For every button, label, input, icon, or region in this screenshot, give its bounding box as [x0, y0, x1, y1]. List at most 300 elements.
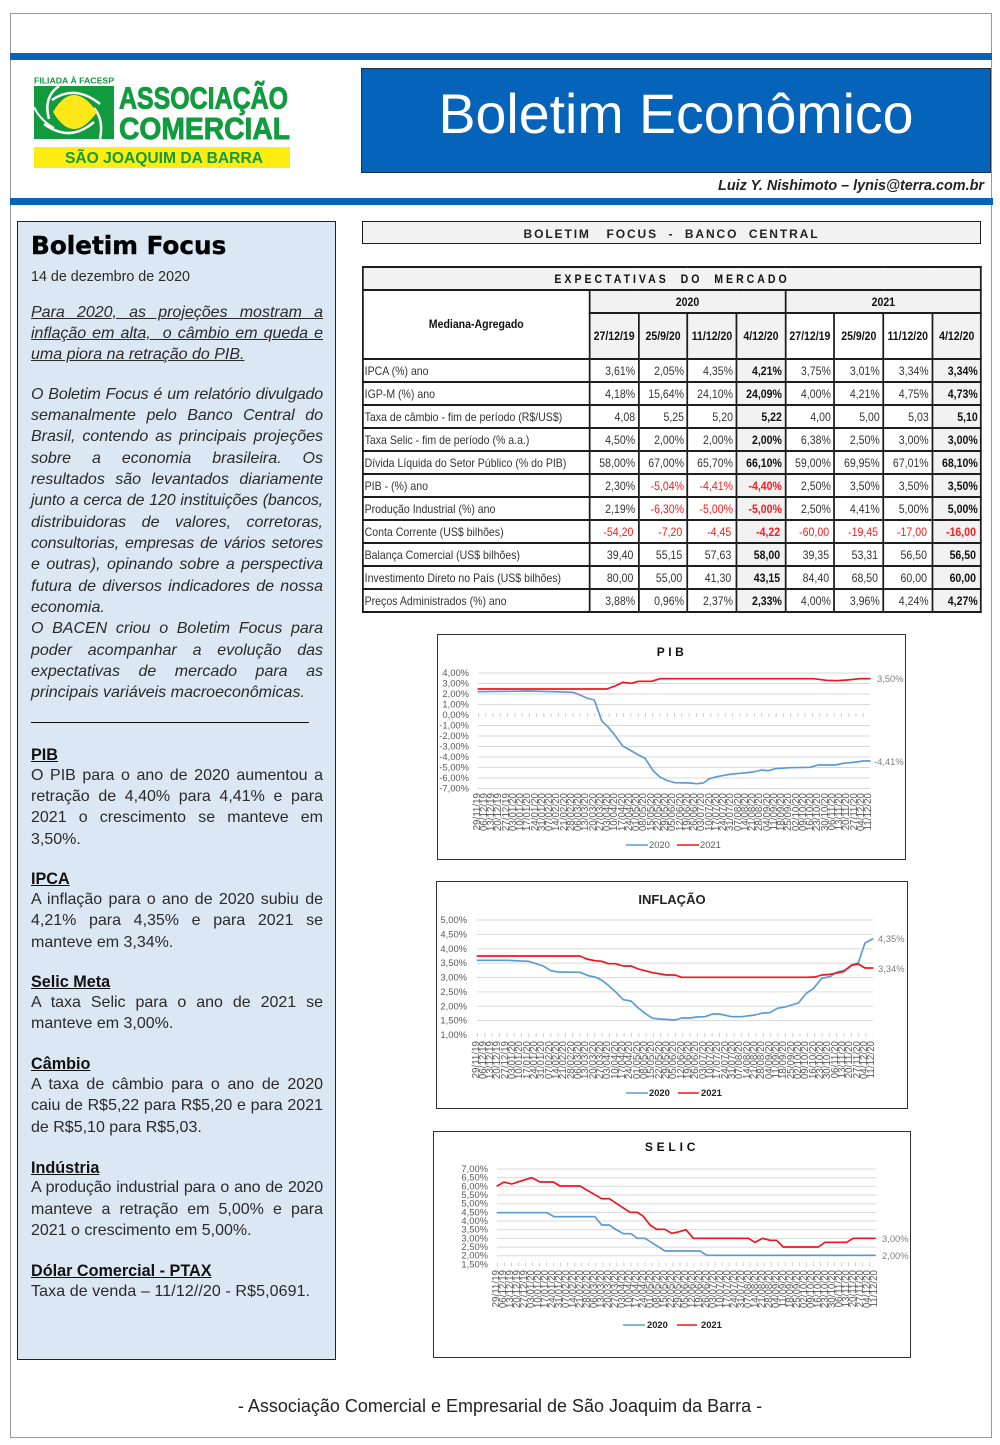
- x axis dates: 17/01/20: [522, 792, 533, 831]
- x axis dates: 03/01/20: [508, 792, 519, 831]
- x axis dates: 29/05/20: [673, 1270, 684, 1308]
- explanation of Boletim Focus: semanalmente pelo Banco Central do: [31, 407, 323, 424]
- table: expectativas do mercado: 55,00: [655, 571, 682, 585]
- table: expectativas do mercado: 56,50: [949, 548, 975, 562]
- x axis dates: 24/04/20: [624, 1040, 635, 1079]
- table: expectativas do mercado: [362, 266, 982, 613]
- x axis dates: 13/11/20: [841, 1270, 852, 1307]
- table: expectativas do mercado: -4,40%: [748, 479, 781, 493]
- y axis labels: 5,00%: [440, 914, 466, 924]
- x axis dates: 09/10/20: [798, 792, 809, 831]
- table: expectativas do mercado: 58,00: [753, 548, 780, 562]
- y axis labels: -3,00%: [439, 740, 468, 751]
- y axis labels: 6,00%: [461, 1180, 488, 1191]
- legend: 2020: [646, 1318, 667, 1330]
- x axis dates: 03/07/20: [696, 792, 707, 831]
- lines 2020 and 2021: [477, 678, 870, 783]
- x axis dates: 03/07/20: [698, 1040, 709, 1079]
- x axis dates: 18/09/20: [776, 792, 787, 831]
- table: expectativas do mercado: 3,34%: [947, 364, 977, 378]
- x axis dates: 06/12/19: [498, 1270, 509, 1308]
- x axis dates: 29/05/20: [660, 792, 671, 831]
- table: expectativas do mercado: 60,00: [949, 571, 975, 585]
- chart title: SELIC: [644, 1140, 699, 1154]
- table: expectativas do mercado: 3,50%: [898, 479, 928, 493]
- table: expectativas do mercado: 2,33%: [751, 594, 781, 608]
- x axis dates: 23/10/20: [815, 1040, 826, 1079]
- legend: 2021: [700, 1086, 721, 1098]
- explanation of Boletim Focus: e outras), opinando sobre a perspectiva: [31, 556, 323, 573]
- table: expectativas do mercado: 3,50%: [849, 479, 879, 493]
- table: expectativas do mercado: 68,50: [851, 571, 878, 585]
- lower blue rule: [10, 198, 993, 205]
- x axis dates: 13/12/19: [485, 1040, 496, 1079]
- table: expectativas do mercado: 25/9/20: [645, 329, 680, 343]
- section: Selic Meta: Selic Meta: [31, 973, 110, 991]
- x axis dates: 06/12/19: [478, 1040, 489, 1079]
- explanation of Boletim Focus: O BACEN criou o Boletim Focus para: [31, 620, 323, 637]
- section: Indústria: manteve a retração em 5,00% e para: [31, 1201, 323, 1218]
- logo: Associação Comercial: [34, 76, 290, 168]
- x axis dates: 13/03/20: [596, 1270, 607, 1308]
- table: expectativas do mercado: 5,25: [663, 410, 684, 424]
- x axis dates: 20/03/20: [603, 1270, 614, 1308]
- table: expectativas do mercado: 4,21%: [849, 387, 879, 401]
- table: expectativas do mercado: -5,00%: [748, 502, 781, 516]
- table: expectativas do mercado: 3,96%: [849, 594, 879, 608]
- x axis dates: 31/01/20: [554, 1270, 565, 1308]
- explanation of Boletim Focus: junto a cerca de 120 instituições (bancos,: [31, 492, 323, 509]
- chart: PIB: [437, 634, 906, 860]
- x axis dates: 17/07/20: [712, 1040, 723, 1079]
- x axis dates: 17/04/20: [631, 1270, 642, 1308]
- section: PIB: PIB: [31, 746, 58, 764]
- explanation of Boletim Focus: resultados são levantados diariamente: [31, 471, 323, 488]
- x axis dates: 21/02/20: [575, 1270, 586, 1308]
- x axis dates: 13/12/19: [505, 1270, 516, 1308]
- y axis labels: 1,50%: [461, 1258, 488, 1269]
- x axis dates: 01/05/20: [645, 1270, 656, 1308]
- table: expectativas do mercado: 24,09%: [746, 387, 781, 401]
- x axis dates: 27/12/19: [500, 1040, 511, 1079]
- x axis dates: 11/12/20: [863, 792, 874, 830]
- x axis dates: 28/02/20: [582, 1270, 593, 1308]
- x axis dates: 29/11/19: [470, 1040, 482, 1078]
- legend: 2020: [648, 1086, 669, 1098]
- x axis dates: 09/10/20: [806, 1270, 817, 1308]
- x axis dates: 01/05/20: [631, 792, 642, 831]
- x axis dates: 16/10/20: [808, 1040, 819, 1079]
- y axis labels: 2,50%: [440, 985, 466, 996]
- x axis dates: [472, 792, 874, 831]
- x axis dates: 26/06/20: [701, 1270, 712, 1308]
- x axis dates: 20/11/20: [848, 1270, 859, 1307]
- table: expectativas do mercado: 65,70%: [697, 456, 732, 470]
- x axis dates: 31/07/20: [736, 1270, 747, 1308]
- table: expectativas do mercado: 4,27%: [947, 594, 977, 608]
- x axis dates: 03/07/20: [708, 1270, 719, 1308]
- x axis dates: 22/05/20: [654, 1040, 665, 1079]
- table: expectativas do mercado: -4,41%: [699, 479, 732, 493]
- y axis labels: 3,00%: [442, 677, 468, 688]
- x axis dates: 22/05/20: [666, 1270, 677, 1308]
- x axis dates: 07/08/20: [732, 792, 744, 831]
- x axis dates: 15/05/20: [646, 1040, 657, 1079]
- table: expectativas do mercado: Mediana-Agregado: [428, 317, 523, 331]
- x axis dates: 21/02/20: [558, 1040, 569, 1079]
- end value labels: 2,00%: [882, 1250, 908, 1260]
- table: expectativas do mercado: 3,50%: [947, 479, 977, 493]
- explanation of Boletim Focus: economia.: [31, 599, 105, 616]
- table: expectativas do mercado: 6,38%: [800, 433, 830, 447]
- table: expectativas do mercado: 5,20: [712, 410, 732, 424]
- x axis dates: 17/04/20: [616, 792, 628, 831]
- section: IPCA: [31, 870, 323, 951]
- x axis dates: 06/03/20: [589, 1270, 600, 1308]
- x axis dates: 20/11/20: [844, 1040, 855, 1078]
- table: expectativas do mercado: 4,00: [810, 410, 830, 424]
- x axis dates: 10/07/20: [715, 1270, 726, 1308]
- x axis dates: 21/08/20: [747, 792, 758, 831]
- section: Câmbio: caiu de R$5,22 para R$5,20 e para 2021: [31, 1097, 323, 1114]
- section: IPCA: IPCA: [31, 870, 70, 888]
- end value labels: [874, 672, 903, 766]
- y axis labels: -7,00%: [439, 782, 468, 793]
- table: expectativas do mercado: 57,63: [704, 548, 731, 562]
- y axis labels: [440, 914, 466, 1040]
- x axis dates: 12/06/20: [674, 792, 686, 831]
- explanation of Boletim Focus: sobre a economia brasileira. Os: [31, 450, 323, 467]
- table: expectativas do mercado: 4,24%: [898, 594, 928, 608]
- table: expectativas do mercado: 2,00%: [654, 433, 684, 447]
- table: expectativas do mercado: 2,19%: [605, 502, 635, 516]
- table: expectativas do mercado: 2020: [675, 294, 699, 308]
- y axis labels: -4,00%: [439, 750, 468, 762]
- section: PIB: 3,50%.: [31, 831, 81, 848]
- table: expectativas do mercado: 2021: [871, 294, 895, 308]
- x axis dates: 27/03/20: [595, 792, 606, 831]
- table: expectativas do mercado: -4,45: [707, 525, 731, 539]
- table: expectativas do mercado: 4/12/20: [743, 329, 778, 343]
- table: expectativas do mercado: 3,34%: [898, 364, 928, 378]
- legend: [622, 1318, 721, 1330]
- x axis dates: 11/09/20: [771, 1040, 782, 1078]
- x axis dates: 23/10/20: [820, 1270, 831, 1308]
- section: Câmbio: de R$5,10 para R$5,03.: [31, 1119, 202, 1136]
- x axis dates: 31/01/20: [537, 792, 548, 831]
- x axis dates: 04/09/20: [762, 792, 772, 831]
- section: Selic Meta: manteve em 3,00%.: [31, 1015, 173, 1032]
- end value labels: -4,41%: [874, 756, 903, 766]
- y axis labels: 3,50%: [461, 1223, 488, 1234]
- intro summary: uma piora na retração do PIB.: [31, 346, 244, 363]
- table: expectativas do mercado: IPCA (%) ano: [364, 364, 428, 378]
- x axis dates: 10/01/20: [514, 1040, 525, 1079]
- x axis dates: 15/05/20: [646, 792, 656, 831]
- table: expectativas do mercado: 39,35: [802, 548, 829, 562]
- x axis dates: 07/02/20: [561, 1270, 572, 1308]
- table: expectativas do mercado: 69,95%: [843, 456, 879, 470]
- x axis dates: 27/11/20: [848, 792, 860, 830]
- table: expectativas do mercado: 4/12/20: [939, 329, 974, 343]
- explanation of Boletim Focus: O Boletim Focus é um relatório divulgado: [31, 386, 323, 403]
- table: expectativas do mercado: 4,50%: [605, 433, 635, 447]
- table: expectativas do mercado: 3,01%: [849, 364, 879, 378]
- x axis dates: 30/10/20: [827, 1270, 838, 1308]
- x axis dates: 17/01/20: [540, 1270, 551, 1308]
- table: expectativas do mercado: Taxa Selic - fim de período (% a.a.): [364, 433, 529, 447]
- x axis dates: 22/05/20: [653, 792, 664, 831]
- section: Câmbio: A taxa de câmbio para o ano de 2020: [31, 1076, 323, 1093]
- table: expectativas do mercado: 27/12/19: [593, 329, 634, 343]
- chart title: PIB: [656, 644, 687, 658]
- table: expectativas do mercado: 0,96%: [654, 594, 684, 608]
- x axis dates: 03/01/20: [507, 1040, 518, 1079]
- y axis labels: 3,00%: [440, 971, 466, 982]
- table: expectativas do mercado: 59,00%: [795, 456, 830, 470]
- x axis dates: 06/12/19: [479, 792, 490, 831]
- x axis dates: 26/06/20: [689, 792, 700, 831]
- x axis dates: 06/11/20: [834, 1270, 845, 1307]
- section: PIB: O PIB para o ano de 2020 aumentou a: [31, 767, 323, 784]
- y axis labels: -2,00%: [439, 730, 468, 740]
- table: expectativas do mercado: PIB - (%) ano: [364, 479, 427, 493]
- x axis dates: 16/10/20: [805, 792, 816, 831]
- table: expectativas do mercado: 5,00%: [947, 502, 977, 516]
- table: expectativas do mercado: Produção Industrial (%) ano: [364, 502, 495, 516]
- section: Indústria: A produção industrial para o ano de 2020: [31, 1179, 323, 1196]
- y axis labels: 0,00%: [442, 708, 468, 720]
- table: expectativas do mercado: 3,88%: [605, 594, 635, 608]
- x axis dates: 04/12/20: [859, 1040, 870, 1079]
- end value labels: 3,00%: [882, 1232, 908, 1244]
- section: IPCA: manteve em 3,34%.: [31, 934, 173, 951]
- table: expectativas do mercado: 4,00%: [800, 387, 830, 401]
- x axis dates: 21/08/20: [749, 1040, 760, 1079]
- x axis dates: 24/01/20: [547, 1270, 558, 1308]
- table: expectativas do mercado: 5,00: [859, 410, 879, 424]
- table: expectativas do mercado: 68,10%: [941, 456, 977, 470]
- x axis dates: 16/10/20: [813, 1270, 824, 1308]
- y axis labels: 2,00%: [442, 688, 468, 698]
- table: expectativas do mercado: 4,41%: [849, 502, 879, 516]
- section: Dólar Comercial: [31, 1262, 310, 1300]
- section: PIB: retração de 4,40% para 4,41% e para: [31, 788, 323, 805]
- table: expectativas do mercado: Dívida Líquida do Setor Público (% do PIB): [364, 456, 566, 470]
- y axis labels: [439, 666, 468, 793]
- section: Indústria: [31, 1159, 324, 1239]
- end value labels: 4,35%: [878, 932, 904, 944]
- x axis dates: 02/10/20: [790, 792, 802, 831]
- x axis dates: 19/06/20: [683, 1040, 694, 1079]
- table: expectativas do mercado: IGP-M (%) ano: [364, 387, 434, 401]
- table: expectativas do mercado: 2,50%: [800, 502, 830, 516]
- x axis dates: 05/06/20: [680, 1270, 691, 1308]
- x axis dates: 14/08/20: [750, 1270, 761, 1308]
- table: expectativas do mercado: -60,00: [799, 525, 829, 539]
- table: expectativas do mercado: 4,75%: [898, 387, 928, 401]
- x axis dates: 27/11/20: [855, 1270, 866, 1307]
- x axis dates: 02/10/20: [793, 1040, 804, 1079]
- explanation of Boletim Focus: expectativas de mercado para as: [31, 663, 323, 680]
- x axis dates: 24/04/20: [638, 1270, 649, 1308]
- table: expectativas do mercado: 4,73%: [947, 387, 977, 401]
- section: Câmbio: [31, 1055, 323, 1136]
- y axis labels: -1,00%: [439, 719, 468, 730]
- end value labels: 3,50%: [876, 672, 903, 684]
- table: expectativas do mercado: Conta Corrente (US$ bilhões): [364, 525, 503, 539]
- explanation of Boletim Focus: distribuidoras de valores, corretoras,: [31, 514, 323, 531]
- table: expectativas do mercado: 43,15: [753, 571, 780, 585]
- logo city band: SÃO JOAQUIM DA BARRA: [65, 147, 263, 167]
- explanation of Boletim Focus: poder acompanhar a evolução das: [31, 642, 323, 659]
- x axis dates: 27/03/20: [610, 1270, 621, 1308]
- y axis labels: 4,50%: [461, 1206, 488, 1217]
- title banner: Boletim Econômico: [438, 83, 914, 145]
- y axis labels: -5,00%: [439, 761, 468, 772]
- y axis labels: 4,00%: [440, 942, 466, 953]
- table: expectativas do mercado: 67,01%: [892, 456, 928, 470]
- x axis dates: 20/03/20: [588, 792, 598, 831]
- x axis dates: 10/04/20: [610, 1040, 621, 1079]
- x axis dates: 14/02/20: [551, 1040, 562, 1079]
- table: expectativas do mercado: 11/12/20: [887, 329, 927, 343]
- x axis dates: 02/10/20: [799, 1270, 810, 1308]
- table: expectativas do mercado: 53,31: [851, 548, 878, 562]
- x axis dates: 25/09/20: [786, 1040, 797, 1079]
- table: expectativas do mercado: 4,08: [614, 410, 635, 424]
- y axis labels: [461, 1162, 488, 1269]
- title banner: [361, 68, 991, 173]
- section divider: [31, 722, 309, 723]
- date: 14 de dezembro de 2020: [31, 269, 190, 285]
- x axis dates: 20/12/19: [512, 1270, 523, 1308]
- y axis labels: 3,00%: [461, 1232, 488, 1243]
- x axis dates: 14/02/20: [568, 1270, 579, 1308]
- chart title: INFLAÇÃO: [638, 892, 705, 906]
- x axis dates: 27/12/19: [500, 792, 512, 831]
- y axis labels: 4,00%: [442, 666, 468, 678]
- y axis labels: 6,50%: [461, 1171, 488, 1182]
- x axis dates: 31/01/20: [536, 1040, 547, 1079]
- table: expectativas do mercado: 84,40: [802, 571, 829, 585]
- legend: [626, 1086, 721, 1098]
- x axis dates: 03/01/20: [526, 1270, 537, 1308]
- x axis dates: 27/12/19: [519, 1270, 530, 1308]
- x axis dates: 20/12/19: [493, 792, 504, 831]
- table: expectativas do mercado: 4,21%: [751, 364, 781, 378]
- x axis dates: 31/07/20: [727, 1040, 738, 1079]
- x axis dates: 29/05/20: [661, 1040, 672, 1079]
- x axis dates: 13/11/20: [834, 792, 845, 830]
- x axis dates: 05/06/20: [668, 1040, 679, 1079]
- table: expectativas do mercado: 4,18%: [605, 387, 635, 401]
- x axis dates: 10/07/20: [705, 1040, 716, 1079]
- x axis dates: 24/01/20: [530, 792, 540, 831]
- intro summary: inflação em alta, o câmbio em queda e: [31, 325, 323, 342]
- x axis dates: 05/06/20: [667, 792, 678, 831]
- x axis dates: 03/04/20: [602, 792, 613, 831]
- x axis dates: 11/12/20: [866, 1040, 877, 1078]
- table: expectativas do mercado: 4,35%: [703, 364, 732, 378]
- legend: 2021: [700, 838, 720, 850]
- table: expectativas do mercado: 3,61%: [605, 364, 635, 378]
- table: expectativas do mercado: 80,00: [606, 571, 633, 585]
- legend: 2020: [648, 838, 669, 850]
- y axis labels: 5,00%: [461, 1197, 488, 1208]
- section: IPCA: A inflação para o ano de 2020 subiu de: [31, 891, 323, 908]
- table: expectativas do mercado: -16,00: [946, 525, 975, 539]
- x axis dates: 19/06/20: [682, 792, 693, 831]
- x axis dates: 10/04/20: [624, 1270, 635, 1308]
- x axis dates: 14/02/20: [551, 792, 562, 831]
- x axis dates: 30/10/20: [822, 1040, 833, 1079]
- x axis dates: 14/08/20: [740, 792, 751, 831]
- top blue rule: [10, 53, 992, 60]
- x axis dates: 24/07/20: [720, 1040, 731, 1079]
- legend: 2021: [700, 1318, 721, 1330]
- x axis dates: 21/08/20: [757, 1270, 768, 1308]
- table: expectativas do mercado: EXPECTATIVAS DO MERCADO: [554, 272, 789, 286]
- table: expectativas do mercado: -5,00%: [699, 502, 732, 516]
- x axis dates: 12/06/20: [687, 1270, 698, 1308]
- x axis dates: [470, 1040, 877, 1079]
- table: expectativas do mercado: 55,15: [655, 548, 682, 562]
- table: expectativas do mercado: 4,00%: [800, 594, 830, 608]
- x axis dates: 31/07/20: [725, 792, 736, 831]
- x axis dates: 28/02/20: [566, 1040, 577, 1079]
- x axis dates: 04/12/20: [856, 792, 867, 831]
- table: expectativas do mercado: 27/12/19: [789, 329, 830, 343]
- end value labels: 3,34%: [878, 962, 904, 974]
- table: expectativas do mercado: 24,10%: [697, 387, 732, 401]
- section: IPCA: 4,21% para 4,35% e para 2021 se: [31, 912, 323, 929]
- x axis dates: 13/03/20: [580, 792, 591, 831]
- table: expectativas do mercado: 2,30%: [605, 479, 635, 493]
- explanation of Boletim Focus: consultorias, empresas de vários setores: [31, 535, 323, 552]
- section: PIB: [31, 746, 324, 848]
- y axis labels: 1,50%: [440, 1014, 466, 1025]
- table: expectativas do mercado: 5,03: [908, 410, 928, 424]
- x axis dates: 10/04/20: [609, 792, 620, 831]
- section: Selic Meta: [31, 973, 323, 1032]
- x axis dates: 25/09/20: [783, 792, 794, 831]
- section: Selic Meta: A taxa Selic para o ano de 2021 se: [31, 994, 323, 1011]
- y axis labels: -6,00%: [439, 772, 468, 782]
- table: expectativas do mercado: -5,04%: [650, 479, 684, 493]
- logo tagline: FILIADA À FACESP: [34, 76, 115, 86]
- x axis dates: 10/01/20: [515, 792, 526, 831]
- x axis dates: 28/02/20: [566, 792, 577, 831]
- table: expectativas do mercado: -7,20: [658, 525, 682, 539]
- x axis dates: 26/06/20: [690, 1040, 701, 1079]
- table: expectativas do mercado: 15,64%: [648, 387, 684, 401]
- table: expectativas do mercado: -17,00: [897, 525, 926, 539]
- x axis dates: 03/04/20: [617, 1270, 628, 1308]
- x axis dates: 11/09/20: [778, 1270, 789, 1307]
- x axis dates: 28/08/20: [754, 792, 765, 831]
- x axis dates: 23/10/20: [812, 792, 823, 831]
- x axis dates: 12/06/20: [676, 1040, 687, 1079]
- x axis dates: 17/01/20: [522, 1040, 533, 1079]
- panel heading: Boletim Focus: [31, 231, 226, 260]
- y axis labels: 4,00%: [461, 1214, 488, 1226]
- y axis labels: 5,50%: [461, 1188, 488, 1200]
- chart: Selic: [433, 1131, 911, 1358]
- x axis dates: 20/03/20: [588, 1040, 599, 1079]
- x axis dates: 10/07/20: [704, 792, 714, 831]
- x axis dates: 13/11/20: [837, 1040, 848, 1078]
